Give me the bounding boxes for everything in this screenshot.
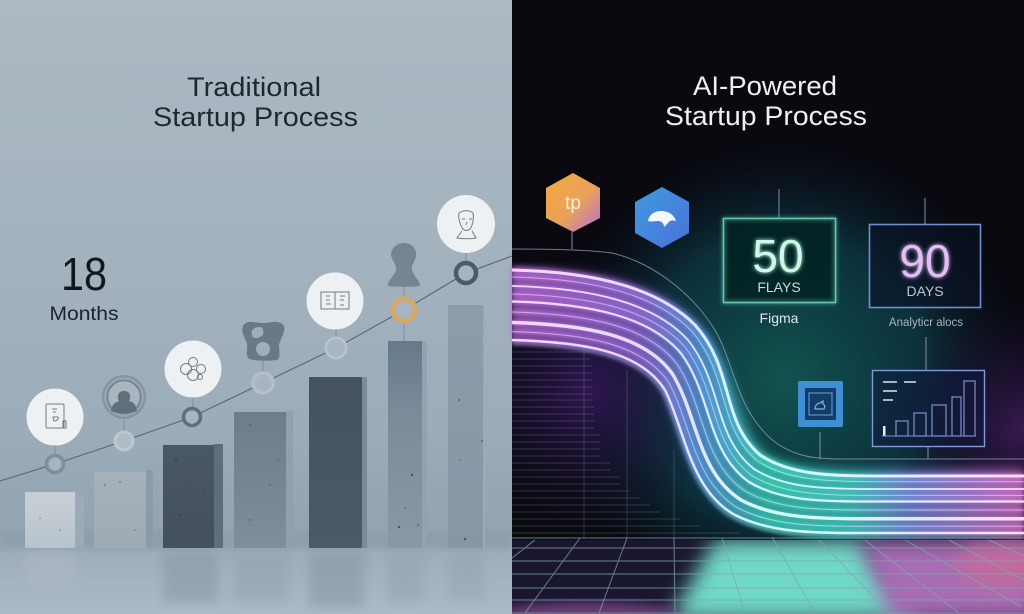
icon: portrait [103,376,145,418]
chart box: analytics dashboard [872,370,984,446]
label: figma: Figma [760,310,799,326]
icon: orange hexagon: tp [565,193,581,214]
stat: 18 months: 18 [61,248,107,300]
icon: face [437,195,495,253]
icon: pawn figure [388,243,420,287]
icon: blue square [798,381,843,427]
floor glow [500,540,1024,614]
icon: orange hexagon [546,173,600,232]
heading: ai-powered: AI-Powered [693,71,837,101]
heading: traditional: Startup Process [153,102,358,132]
icon: blue hexagon [635,187,689,248]
icon: circles [164,340,222,398]
icon: document [26,388,84,446]
stat: 18 months [50,248,118,325]
heading: traditional: Traditional [187,72,321,102]
bar chart: concrete bars [25,305,485,548]
floor shadow [0,533,512,549]
heading: ai-powered: Startup Process [665,101,867,131]
floor reflections [25,552,484,607]
thin guide curve [512,249,1024,459]
stat box: 90 days [870,224,980,308]
icon: blob figure [242,322,284,361]
label: analytics: Analyticr alocs [889,317,963,329]
panel: ai-powered startup process [500,0,1024,614]
stat box: 50 flays: FLAYS [757,279,801,295]
panel: traditional startup process [0,0,512,614]
back wall grid [512,345,740,538]
stat: 18 months: Months [50,304,118,325]
connectors [572,189,928,459]
stat box: 90 days: 90 [899,235,951,287]
trend line [0,256,512,481]
stat box: 50 flays: 50 [752,230,804,282]
light streams [512,270,1024,536]
floor grid [512,537,1024,613]
icon: document spread [306,272,364,330]
timeline nodes [46,263,476,472]
stat box: 50 flays [724,218,836,302]
connectors [55,253,466,456]
stat box: 90 days: DAYS [906,283,944,299]
